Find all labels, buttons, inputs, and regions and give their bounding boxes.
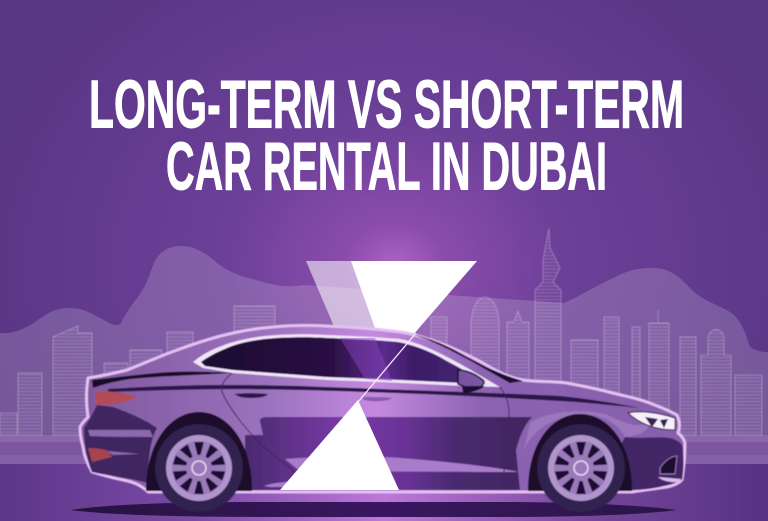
rear reflector	[88, 448, 112, 462]
sill light stripe	[264, 481, 300, 487]
rear wheel	[155, 424, 243, 512]
rear door seam	[221, 373, 294, 472]
front lip	[658, 477, 681, 482]
front fender highlight	[524, 411, 648, 450]
taillight	[96, 391, 137, 405]
second door handle	[362, 397, 392, 401]
ground	[0, 464, 768, 521]
rear bumper highlight	[88, 430, 153, 437]
lower light triangle	[280, 400, 399, 490]
title	[89, 66, 684, 204]
front wheel	[537, 424, 625, 512]
light beam in window	[340, 338, 392, 381]
headlight	[628, 412, 675, 430]
car	[80, 325, 685, 512]
lower door band	[245, 417, 532, 490]
city base strips	[0, 435, 768, 464]
rear lower stripe	[108, 451, 140, 455]
city skyline	[0, 228, 762, 435]
headlight detail	[645, 417, 668, 428]
mirror base	[462, 386, 484, 392]
front wheel arch	[528, 414, 632, 491]
front lower panel	[618, 437, 684, 490]
window glass	[201, 337, 486, 384]
front grille	[660, 456, 677, 474]
rear wheel arch	[146, 412, 252, 491]
door handle	[234, 393, 268, 398]
mountain silhouette	[0, 246, 768, 436]
thin light line across the car	[358, 333, 416, 402]
beltline	[108, 385, 640, 408]
side mirror	[458, 370, 484, 392]
upper dark roof trim	[412, 334, 523, 383]
top light triangle	[306, 261, 477, 350]
car shadow	[70, 502, 677, 517]
window frame	[193, 334, 500, 387]
rear lower panel	[84, 405, 157, 483]
rear spoiler line	[92, 372, 232, 388]
car body	[80, 325, 685, 492]
lower light stripe	[285, 457, 519, 472]
front door seam	[500, 387, 509, 478]
